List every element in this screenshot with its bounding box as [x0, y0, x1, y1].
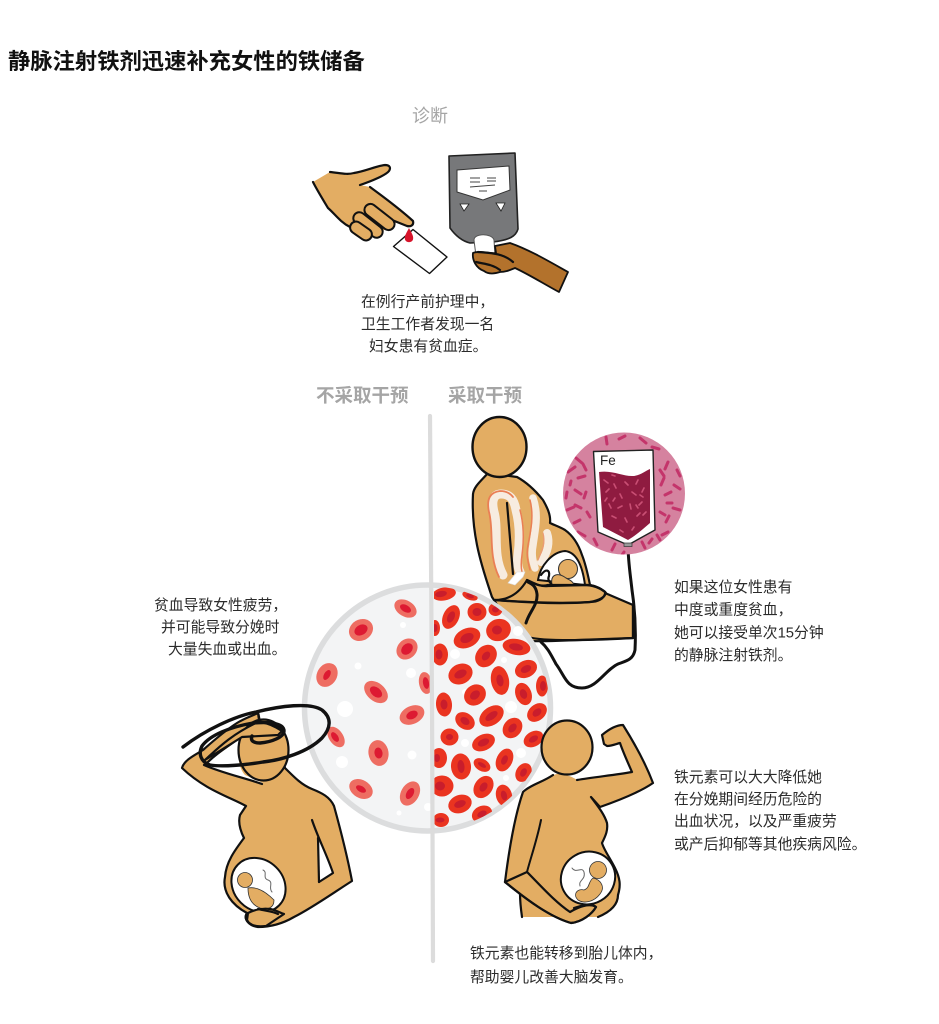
heading: no intervention: 不采取干预 — [316, 385, 409, 406]
arm band — [508, 572, 525, 585]
figure: fatigued woman without intervention — [182, 706, 352, 927]
text: anemia consequences: 并可能导致分娩时 — [161, 619, 280, 636]
text: diagnosis description: 妇女患有贫血症。 — [369, 337, 487, 355]
head — [472, 417, 526, 477]
text: diagnosis description — [361, 294, 494, 355]
figure: healthy woman with intervention — [505, 720, 653, 923]
head — [238, 720, 288, 780]
text: anemia consequences: 大量失血或出血。 — [168, 641, 286, 658]
blood drop — [405, 228, 413, 242]
text: iron reduces risk: 出血状况，以及严重疲劳 — [674, 813, 837, 830]
womb with fetus — [551, 842, 625, 914]
cells: low iron — [312, 596, 434, 809]
text: iron reduces risk: 或产后抑郁等其他疾病风险。 — [674, 835, 866, 853]
forearm over belly — [505, 872, 596, 923]
text: anemia consequences — [154, 596, 287, 658]
text: infusion explanation: 的静脉注射铁剂。 — [674, 647, 792, 664]
head — [542, 720, 592, 774]
text: diagnosis description: 卫生工作者发现一名 — [361, 316, 494, 333]
text: iron reduces risk: 铁元素可以大大降低她 — [674, 769, 822, 786]
cells: healthy iron — [430, 586, 551, 827]
text: anemia consequences: 贫血导致女性疲劳， — [154, 596, 287, 614]
icon: iron bag in pink circle — [563, 432, 685, 558]
text: fetus brain development: 帮助婴儿改善大脑发育。 — [470, 969, 633, 986]
heading: intervention: 采取干预 — [448, 385, 523, 406]
hand over belly — [247, 909, 284, 926]
arm — [495, 580, 606, 603]
text: fetus brain development: 铁元素也能转移到胎儿体内， — [470, 945, 662, 962]
iron bag liquid — [599, 469, 650, 540]
text: infusion explanation: 如果这位女性患有 — [674, 578, 792, 596]
dizzy spiral — [183, 706, 329, 766]
infusion tube — [526, 545, 635, 688]
fetus in womb — [538, 551, 585, 585]
label: Fe: Fe — [600, 453, 616, 468]
text: infusion explanation: 她可以接受单次15分钟 — [674, 624, 824, 642]
figure: seated woman receiving infusion — [472, 417, 635, 688]
text: iron reduces risk — [674, 769, 866, 853]
curled fingers — [362, 201, 397, 233]
womb with fetus — [220, 847, 297, 923]
text: infusion explanation — [674, 578, 824, 664]
heading: diagnosis: 诊断 — [412, 106, 448, 126]
text: diagnosis description: 在例行产前护理中， — [361, 294, 494, 310]
icon: hand pricked finger — [313, 165, 447, 274]
title: 静脉注射铁剂迅速补充女性的铁储备 — [8, 49, 365, 74]
heat stripes — [488, 491, 548, 577]
text: infusion explanation: 中度或重度贫血， — [674, 602, 792, 618]
icon: hemoglobin meter with hand — [449, 153, 568, 292]
white speckles — [336, 622, 526, 816]
body — [182, 713, 352, 927]
text: fetus brain development — [470, 945, 662, 986]
divider line — [430, 416, 433, 961]
test strip — [394, 230, 447, 274]
text: iron reduces risk: 在分娩期间经历危险的 — [674, 791, 822, 808]
chart: blood cell comparison circle — [304, 585, 551, 831]
